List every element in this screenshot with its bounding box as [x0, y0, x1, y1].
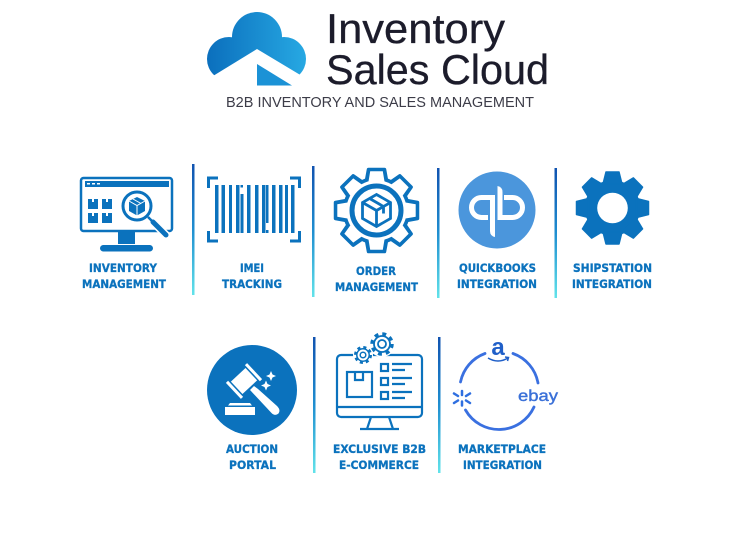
title: Sales Cloud [326, 46, 549, 93]
logo: cloud [195, 12, 320, 92]
divider 1 [192, 164, 194, 295]
label: marketplace integration: MARKETPLACE [458, 442, 546, 456]
label: shipstation integration: INTEGRATION [572, 277, 652, 291]
divider 5 [313, 337, 316, 473]
icon: order gear [336, 170, 418, 252]
label: imei tracking: IMEI [240, 261, 264, 275]
label: marketplace integration [458, 442, 546, 472]
icon: marketplace ring: ebay [518, 388, 558, 405]
title [326, 5, 549, 93]
label: quickbooks integration: INTEGRATION [457, 277, 537, 291]
label: auction portal: AUCTION [226, 442, 278, 456]
icon: b2b e-commerce monitor [337, 331, 422, 429]
label: order management [335, 264, 418, 294]
subtitle: B2B INVENTORY AND SALES MANAGEMENT [226, 94, 534, 111]
label: quickbooks integration [457, 261, 537, 291]
label: inventory management [82, 261, 166, 291]
title: Inventory [326, 5, 505, 52]
label: exclusive b2b e-commerce: E-COMMERCE [339, 458, 419, 472]
divider 6 [438, 337, 440, 473]
divider 3 [437, 168, 440, 298]
label: shipstation integration: SHIPSTATION [573, 261, 652, 275]
icon: auction gavel [207, 345, 297, 435]
label: order management: MANAGEMENT [335, 280, 418, 294]
icon: quickbooks [458, 172, 536, 248]
divider 2 [312, 166, 314, 297]
label: imei tracking: TRACKING [222, 277, 282, 291]
label: marketplace integration: INTEGRATION [463, 458, 542, 472]
icon: shipstation gear [576, 172, 648, 244]
icon: inventory monitor [81, 178, 172, 252]
icon: marketplace ring: a [491, 334, 505, 361]
icon: barcode [208, 178, 300, 241]
divider 4 [554, 168, 557, 298]
label: exclusive b2b e-commerce [333, 442, 426, 472]
label: imei tracking [222, 261, 282, 291]
label: auction portal: PORTAL [229, 458, 277, 472]
label: exclusive b2b e-commerce: EXCLUSIVE B2B [333, 442, 426, 456]
icon: marketplace ring [454, 334, 558, 429]
label: inventory management: MANAGEMENT [82, 277, 166, 291]
label: quickbooks integration: QUICKBOOKS [459, 261, 536, 275]
label: inventory management: INVENTORY [89, 261, 158, 275]
label: order management: ORDER [356, 264, 396, 278]
label: auction portal [226, 442, 278, 472]
label: shipstation integration [572, 261, 652, 291]
